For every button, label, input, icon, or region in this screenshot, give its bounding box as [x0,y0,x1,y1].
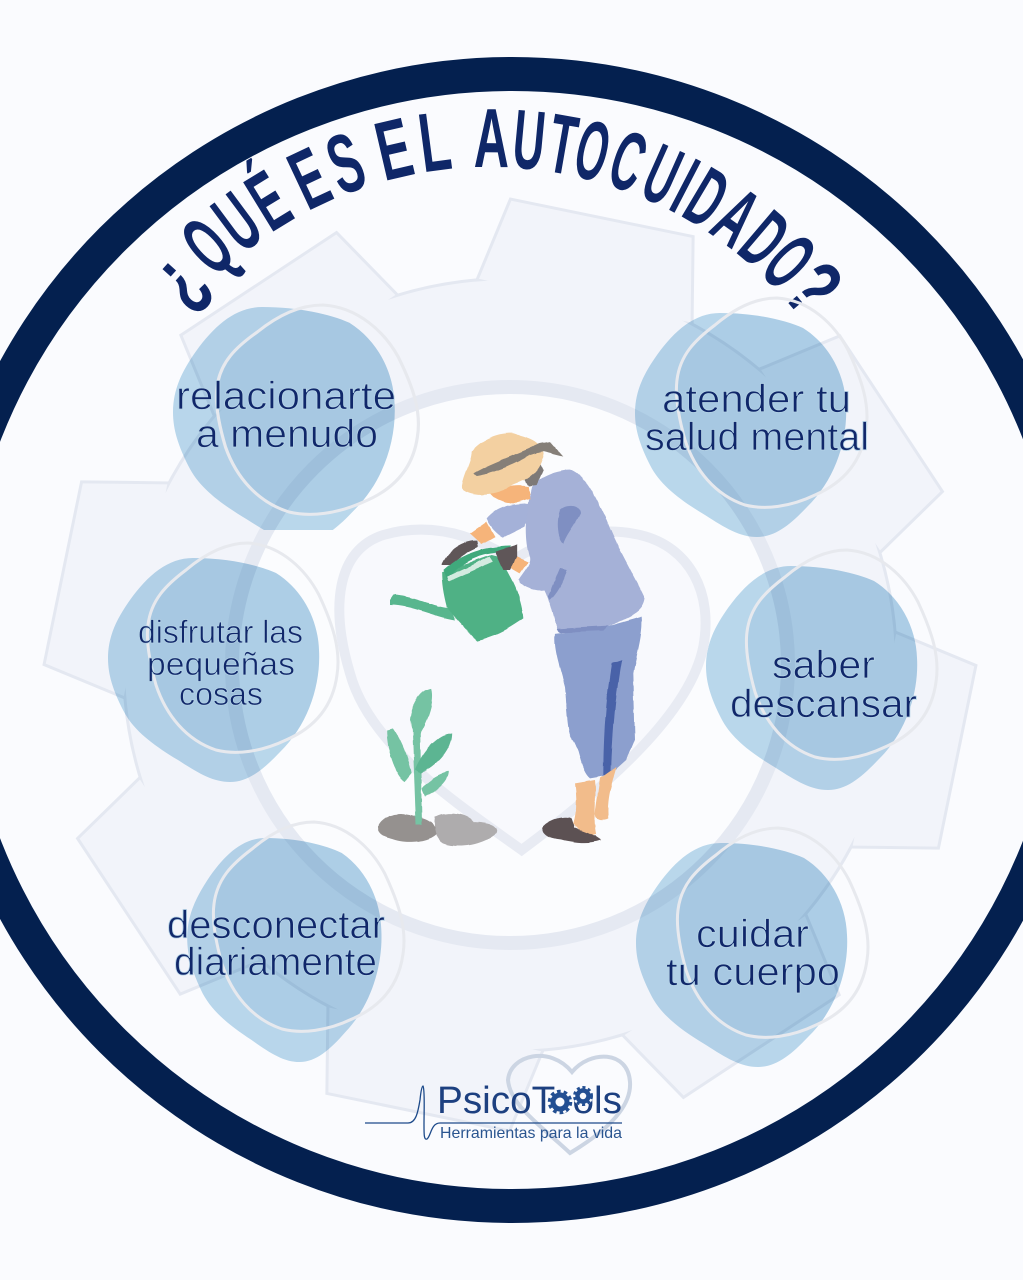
title: L [413,93,456,190]
face [488,486,530,503]
shirt [518,470,645,632]
title: T [542,96,584,194]
title: U [509,92,549,189]
logo gear large [548,1090,572,1114]
blob: atender tu salud mental [635,298,869,537]
blob: desconectar diariamente: desconectar [167,904,385,947]
blob: cuidar tu cuerpo: cuidar [696,913,809,956]
logo tagline: Herramientas para la vida [440,1125,622,1142]
logo gear small [573,1086,593,1106]
blob: relacionarte a menudo: a menudo [196,413,378,456]
blob: saber descansar [706,550,937,790]
title: ¿ [130,233,223,322]
blob: relacionarte a menudo: relacionarte [176,375,396,418]
title: I [658,142,711,231]
title: Q [165,201,252,293]
blob: desconectar diariamente: diariamente [174,941,377,984]
title: E [367,99,421,199]
title: U [630,125,695,223]
hat band [473,442,563,476]
shoe [542,817,602,843]
legs [573,767,617,835]
plant soil right [434,813,497,846]
title: O [566,101,619,200]
title: A [696,170,777,265]
plant soil [378,814,437,842]
hair [525,463,543,486]
illustration: gardener watering a plant inside a heart [339,433,706,850]
watering can spout [390,595,455,620]
shirt shadow [548,506,608,632]
blob: disfrutar las pequeñas cosas: pequeñas [147,646,295,682]
blob: disfrutar las pequeñas cosas [108,543,338,782]
gear background [43,198,977,1132]
watercolor figure group [378,433,645,846]
can highlight [447,557,493,582]
blob: disfrutar las pequeñas cosas: cosas [179,676,263,712]
logo: PsicoTools [365,1056,630,1153]
title: E [276,130,344,228]
title [130,91,860,332]
blob: saber descansar: saber [772,644,875,687]
title: U [197,175,278,269]
blob: cuidar tu cuerpo: tu cuerpo [666,951,840,994]
pants stripe [603,660,622,777]
title: D [722,195,806,285]
gardener pants [555,617,642,778]
blob: relacionarte a menudo [173,305,418,542]
logo wordmark: PsicoTools [437,1080,622,1122]
blob: cuidar tu cuerpo [636,828,868,1067]
title: S [315,114,377,213]
logo heart outline [508,1056,630,1153]
title: A [474,91,509,185]
title: O [745,217,834,306]
can handle [443,546,510,580]
gloves [442,541,517,570]
title: É [232,154,306,249]
arms skin [470,522,528,573]
blob: atender tu salud mental: atender tu [662,378,851,421]
title: C [598,113,657,211]
blob: saber descansar: descansar [730,683,917,726]
sleeve [487,503,532,537]
hat [462,433,543,494]
blob: atender tu salud mental: salud mental [645,416,869,459]
heart outline [339,530,706,850]
plant [387,688,452,825]
title: ? [766,245,860,332]
pulse line [365,1086,622,1139]
watering can body [442,555,523,641]
title: D [670,151,743,247]
blob: disfrutar las pequeñas cosas: disfrutar las [138,614,303,650]
blob: desconectar diariamente [167,822,404,1062]
